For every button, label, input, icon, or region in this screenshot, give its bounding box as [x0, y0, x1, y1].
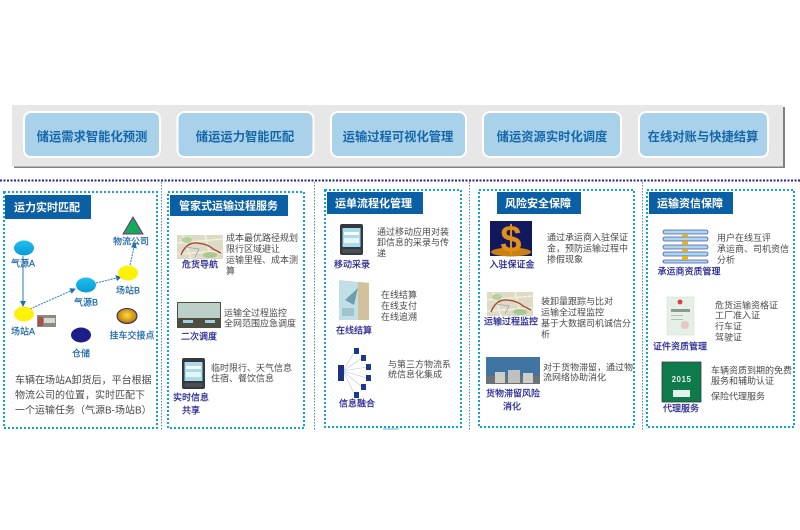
- icon: dispatch monitor: 二次调度: [181, 330, 217, 342]
- node: logistics company: 物流公司: [113, 236, 149, 246]
- text: agency services: 车辆资质到期的免费: [711, 364, 792, 376]
- heading: capacity matching: [5, 195, 91, 219]
- icon: cargo photo: 货物滞留风险: [486, 388, 540, 398]
- icon: online settlement: 在线结算: [336, 324, 372, 336]
- button: capacity matching: [178, 112, 314, 157]
- node: gas source A: 气源A: [11, 258, 35, 268]
- text: certificates: [715, 300, 778, 342]
- text: navigation: 运输里程、成本测: [226, 254, 298, 265]
- icon: mobile capture: 移动采录: [334, 258, 370, 270]
- panel: risk and safety: [479, 190, 634, 427]
- heading: managed transport: 管家式运输过程服务: [179, 198, 278, 212]
- text: agency services: [711, 364, 792, 402]
- text: cargo risk: [543, 362, 633, 382]
- icon: 2015 sticker: 2015: [672, 375, 691, 384]
- top banner: [12, 105, 785, 168]
- text: online settlement: 在线支付: [381, 300, 417, 311]
- text: online settlement: 在线追溯: [381, 311, 417, 322]
- text: mobile capture: 递: [377, 248, 386, 258]
- text: realtime info: [211, 362, 292, 384]
- text: navigation: 算: [226, 265, 235, 276]
- text: monitoring: [541, 296, 631, 340]
- panel: waybill management: [325, 190, 461, 427]
- text: cargo risk: 对于货物滞留，通过物: [543, 362, 633, 372]
- text: online settlement: 在线结算: [381, 289, 417, 300]
- icon: info phone: 实时信息: [173, 392, 209, 402]
- node: station B: [116, 266, 140, 296]
- route arrows: [23, 243, 135, 309]
- icon: carrier stack: 承运商资质管理: [657, 266, 721, 276]
- text: realtime info: 临时限行、天气信息: [211, 362, 292, 373]
- heading: credit assurance: 运输资信保障: [657, 196, 723, 210]
- node: warehouse: 仓储: [72, 348, 90, 358]
- icon: online settlement: [336, 280, 372, 336]
- icon: dispatch monitor: [177, 302, 221, 342]
- icon: navigation map: [177, 235, 223, 270]
- node: trailer exchange point: 挂车交接点: [109, 330, 155, 340]
- text: certificates: 工厂准入证: [715, 310, 760, 320]
- icon: mobile capture: [334, 224, 370, 270]
- icon: cargo photo: 消化: [503, 400, 521, 412]
- button: resource dispatch: [483, 112, 621, 157]
- text: certificates: 驾驶证: [715, 332, 742, 342]
- icon: deposit: [489, 219, 535, 270]
- panel: managed transport services: [168, 192, 304, 428]
- icon: monitoring map: [484, 292, 538, 326]
- text: deposit: 通过承运商入驻保证: [547, 232, 628, 242]
- text: realtime info: 住宿、餐饮信息: [211, 372, 274, 384]
- node: logistics company: [113, 217, 149, 246]
- heading: capacity matching: 运力实时匹配: [14, 200, 80, 214]
- icon: deposit: $: [500, 219, 522, 261]
- text: navigation: [226, 232, 298, 276]
- button: online settlement: [639, 112, 768, 157]
- text: online settlement: [381, 289, 417, 322]
- text: agency services: 服务和辅助认证: [711, 375, 774, 386]
- text: monitoring: 基于大数据司机诚信分: [541, 318, 631, 328]
- node: gas source A: [11, 240, 35, 268]
- text: certificates: 危货运输资格证: [715, 300, 778, 310]
- button: demand forecast: 储运需求智能化预测: [37, 129, 147, 144]
- icon: info phone: 共享: [182, 404, 200, 416]
- text: certificates: 行车证: [715, 320, 742, 332]
- icon: monitoring map: 运输过程监控: [484, 316, 538, 326]
- button: demand forecast: [24, 112, 160, 157]
- heading: risk safety: 风险安全保障: [505, 196, 571, 210]
- icon: 2015 sticker: 代理服务: [663, 402, 699, 414]
- text: carrier rating: 用户在线互评: [717, 232, 771, 243]
- node: station B: 场站B: [116, 284, 140, 296]
- node: station A: 场站A: [11, 326, 35, 336]
- text: carrier rating: 承运商、司机资信: [717, 243, 789, 254]
- text: navigation: 成本最优路径规划: [226, 232, 298, 243]
- icon: navigation map: 危货导航: [182, 258, 218, 270]
- text: deposit: 金，预防运输过程中: [547, 242, 628, 254]
- icon: cargo photo: [486, 357, 540, 412]
- text: matching description: 物流公司的位置，实时匹配下: [15, 388, 145, 402]
- node: trailer exchange point: [109, 308, 155, 340]
- text: integration: 统信息化集成: [388, 368, 442, 380]
- text: mobile capture: 通过移动应用对装: [377, 226, 449, 237]
- text: mobile capture: 卸信息的采录与传: [377, 236, 449, 248]
- icon: info phone: [173, 358, 209, 416]
- text: matching description: 一个运输任务（气源B-场站B）: [15, 404, 152, 416]
- text: dispatch: 全网范围应急调度: [224, 318, 296, 328]
- text: integration: [388, 358, 451, 380]
- button: visual management: 运输过程可视化管理: [343, 129, 453, 144]
- button: visual management: [331, 112, 466, 157]
- text: agency services: 保险代理服务: [711, 390, 765, 402]
- panel: capacity matching: [4, 192, 157, 428]
- text: integration: 与第三方物流系: [388, 358, 451, 370]
- button: resource dispatch: 储运资源实时化调度: [497, 129, 607, 144]
- heading: risk safety: [497, 192, 581, 214]
- text: cargo risk: 流网络协助消化: [543, 372, 606, 382]
- icon: carrier stack: [657, 230, 721, 276]
- text: deposit: 掺假现象: [547, 254, 583, 264]
- heading: managed transport: [170, 195, 288, 216]
- icon: network integration: 信息融合: [339, 398, 375, 408]
- text: mobile capture: [377, 226, 449, 258]
- heading: credit assurance: [649, 192, 733, 214]
- icon: certificate: [653, 297, 707, 352]
- text: dispatch: [224, 307, 296, 328]
- text: matching description: [15, 374, 152, 416]
- text: matching description: 车辆在场站A卸货后，平台根据: [15, 374, 152, 386]
- heading: waybill management: [327, 192, 423, 214]
- text: carrier rating: [717, 232, 789, 265]
- text: carrier rating: 分析: [717, 254, 735, 265]
- heading: waybill management: 运单流程化管理: [335, 196, 412, 210]
- icon: 2015 sticker: [662, 362, 701, 414]
- node: gas source B: [74, 278, 98, 308]
- node: station A: [11, 306, 35, 336]
- panel: credit assurance: [647, 190, 794, 427]
- button: capacity matching: 储运运力智能匹配: [196, 129, 294, 144]
- node: warehouse: [71, 328, 91, 358]
- text: navigation: 限行区域避让: [226, 243, 280, 254]
- node: gas source B: 气源B: [74, 296, 98, 308]
- icon: network integration: [338, 348, 375, 408]
- text: dispatch: 运输全过程监控: [224, 307, 287, 318]
- text: deposit: [547, 232, 628, 264]
- button: online settlement: 在线对账与快捷结算: [648, 129, 758, 144]
- text: monitoring: 装卸量跟踪与比对: [541, 296, 613, 306]
- text: monitoring: 析: [541, 328, 550, 340]
- icon: deposit: 入驻保证金: [489, 258, 535, 270]
- text: monitoring: 运输全过程监控: [541, 306, 604, 318]
- truck thumbnail: [37, 315, 56, 327]
- icon: certificate: 证件资质管理: [653, 340, 707, 352]
